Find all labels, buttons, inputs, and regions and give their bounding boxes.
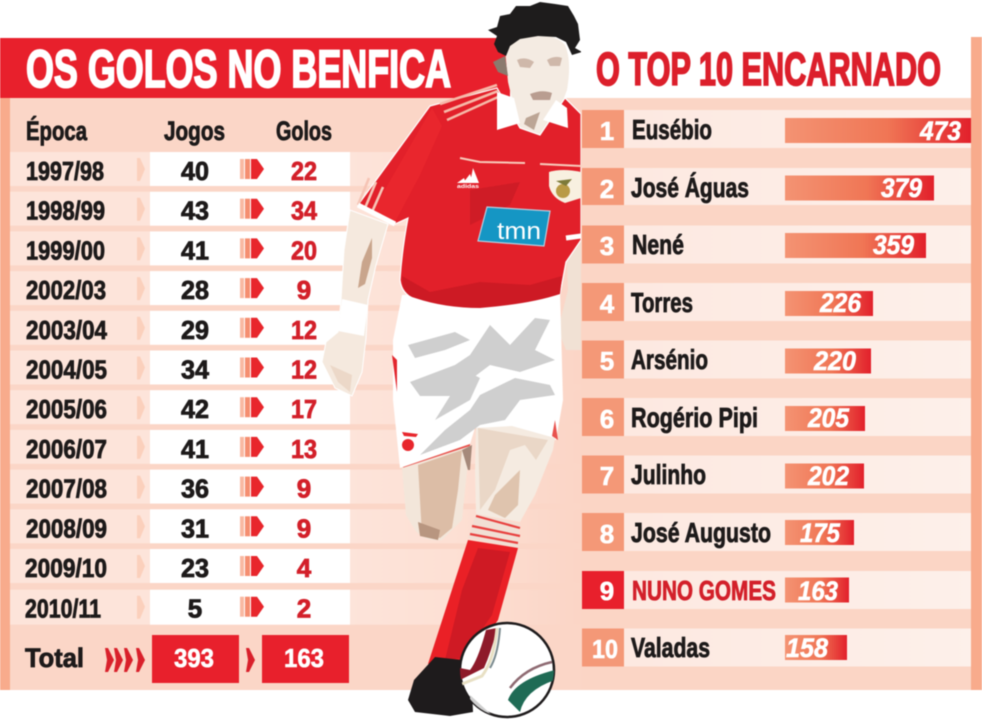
rank 1 Eusébio: 1 [600, 116, 614, 146]
row 1997/98: 22 [291, 156, 317, 186]
row 2008/09: 2008/09 [26, 513, 107, 543]
tmn sponsor logo [478, 207, 550, 246]
rank 4 Torres: 4 [600, 289, 615, 319]
rank 7 Julinho: Julinho [631, 459, 706, 490]
player bent left leg [402, 445, 472, 540]
row 2002/03: 9 [297, 275, 311, 305]
row 1999/00: 20 [291, 235, 317, 265]
row 2005/06: 2005/06 [26, 394, 107, 424]
rank 6 Rogério Pipi: 6 [600, 404, 614, 434]
row 2003/04: 2003/04 [26, 315, 107, 345]
row 2005/06 [10, 390, 581, 424]
rank 4 Torres [582, 283, 971, 321]
total row: 393 [174, 643, 214, 673]
total row [25, 635, 349, 683]
player shorts [392, 292, 563, 470]
football player illustration [322, 2, 582, 720]
rank 6 Rogério Pipi: Rogério Pipi [631, 402, 758, 433]
row 2007/08: 2007/08 [26, 474, 107, 504]
rank 2 José Águas: 2 [600, 174, 614, 204]
row 2007/08 [10, 470, 581, 504]
total row: 163 [284, 643, 324, 673]
rank 10 Valadas: 10 [592, 634, 618, 664]
rank 3 Nené: 3 [600, 231, 614, 261]
table column headers [26, 115, 332, 146]
rank 3 Nené: Nené [632, 229, 684, 260]
left panel background [0, 98, 581, 690]
row 1997/98: 40 [181, 156, 209, 186]
row 2009/10 [10, 549, 581, 583]
row 2006/07: 2006/07 [26, 434, 107, 464]
row 2008/09 [10, 509, 581, 543]
row 2010/11 [10, 590, 581, 625]
rank 7 Julinho: 7 [600, 461, 614, 491]
table rows: goals per season [10, 152, 581, 625]
Benfica crest [549, 170, 581, 203]
rank 6 Rogério Pipi [582, 398, 971, 436]
rank 5 Arsénio: 220 [813, 346, 856, 376]
row 1998/99: 43 [181, 196, 209, 226]
row 2002/03: 28 [181, 275, 209, 305]
rank 8 José Augusto: José Augusto [631, 517, 771, 548]
row 2003/04 [10, 311, 581, 345]
row 2002/03: 2002/03 [26, 275, 106, 305]
rank 5 Arsénio: 5 [600, 346, 614, 376]
rank 9 Nuno Gomes [582, 571, 971, 609]
row 2008/09: 9 [297, 513, 311, 543]
adidas logo: adidas [457, 184, 479, 190]
row 2002/03 [10, 271, 581, 305]
rank 10 Valadas: 158 [786, 633, 828, 663]
rank 9 Nuno Gomes: NUNO GOMES [632, 575, 776, 606]
row 2004/05: 34 [181, 354, 210, 384]
row 2006/07: 13 [291, 434, 317, 464]
row 2010/11: 5 [188, 594, 202, 624]
rank 6 Rogério Pipi: 205 [807, 403, 850, 433]
rank 8 José Augusto [582, 513, 971, 551]
adidas logo [457, 168, 479, 190]
player hair [488, 2, 582, 56]
row 2010/11: 2010/11 [25, 594, 101, 624]
table column headers: Época [26, 115, 88, 146]
player neck and face [493, 35, 569, 135]
rank 4 Torres: Torres [631, 287, 693, 318]
rank 4 Torres: 226 [819, 288, 862, 318]
row 2006/07: 41 [181, 434, 209, 464]
top 10 ranking list [582, 110, 971, 666]
rank 2 José Águas [582, 168, 971, 205]
table column headers: Golos [276, 116, 332, 146]
player right leg [475, 426, 555, 522]
total row: Total [25, 643, 84, 673]
row 2006/07 [10, 430, 581, 464]
row 2004/05 [10, 350, 581, 384]
player boot [408, 657, 473, 716]
row 1997/98: 1997/98 [26, 156, 104, 186]
player left arm and hand [322, 210, 388, 396]
row 1998/99: 1998/99 [26, 196, 105, 226]
row 2003/04: 12 [291, 315, 317, 345]
rank 1 Eusébio: 473 [919, 116, 961, 146]
row 2005/06: 42 [181, 394, 209, 424]
rank 8 José Augusto: 8 [600, 519, 614, 549]
rank 3 Nené: 359 [873, 230, 914, 260]
rank 7 Julinho: 202 [807, 461, 849, 491]
football [460, 623, 555, 720]
rank 10 Valadas: Valadas [631, 632, 710, 663]
row 2009/10: 4 [297, 553, 312, 583]
row 2004/05: 12 [291, 354, 317, 384]
row 1998/99: 34 [291, 196, 317, 226]
rank 1 Eusébio [582, 110, 971, 148]
rank 10 Valadas [582, 628, 971, 666]
row 1999/00: 1999/00 [26, 235, 105, 265]
row 2007/08: 36 [181, 474, 209, 504]
right panel background [581, 37, 982, 690]
rank 9 Nuno Gomes: 163 [798, 576, 838, 606]
row 1998/99 [10, 192, 581, 226]
rank 9 Nuno Gomes: 9 [600, 576, 614, 606]
row 2009/10: 2009/10 [25, 553, 107, 583]
rank 2 José Águas: José Águas [631, 172, 749, 203]
player shirt [358, 85, 581, 308]
rank 1 Eusébio: Eusébio [632, 114, 712, 145]
row 2008/09: 31 [181, 513, 209, 543]
row 2005/06: 17 [291, 394, 317, 424]
row 1999/00 [10, 231, 581, 265]
rank 2 José Águas: 379 [881, 173, 922, 203]
tmn sponsor logo: tmn [497, 218, 541, 245]
table column headers: Jogos [164, 116, 225, 146]
rank 8 José Augusto: 175 [800, 518, 841, 548]
rank 5 Arsénio: Arsénio [631, 344, 708, 375]
row 2010/11: 2 [297, 594, 311, 624]
player right arm [561, 242, 581, 350]
row 2003/04: 29 [181, 315, 209, 345]
player red sock [428, 514, 520, 664]
shirt collar [497, 92, 568, 130]
rank 5 Arsénio [582, 340, 971, 378]
rank 7 Julinho [582, 456, 971, 494]
heading banner: os golos no Benfica: OS GOLOS NO BENFICA [26, 40, 451, 99]
row 2007/08: 9 [297, 474, 311, 504]
row 2004/05: 2004/05 [26, 354, 107, 384]
rank 3 Nené [582, 226, 971, 264]
row 1999/00: 41 [181, 235, 209, 265]
row 1997/98 [10, 152, 581, 186]
row 2009/10: 23 [181, 553, 209, 583]
